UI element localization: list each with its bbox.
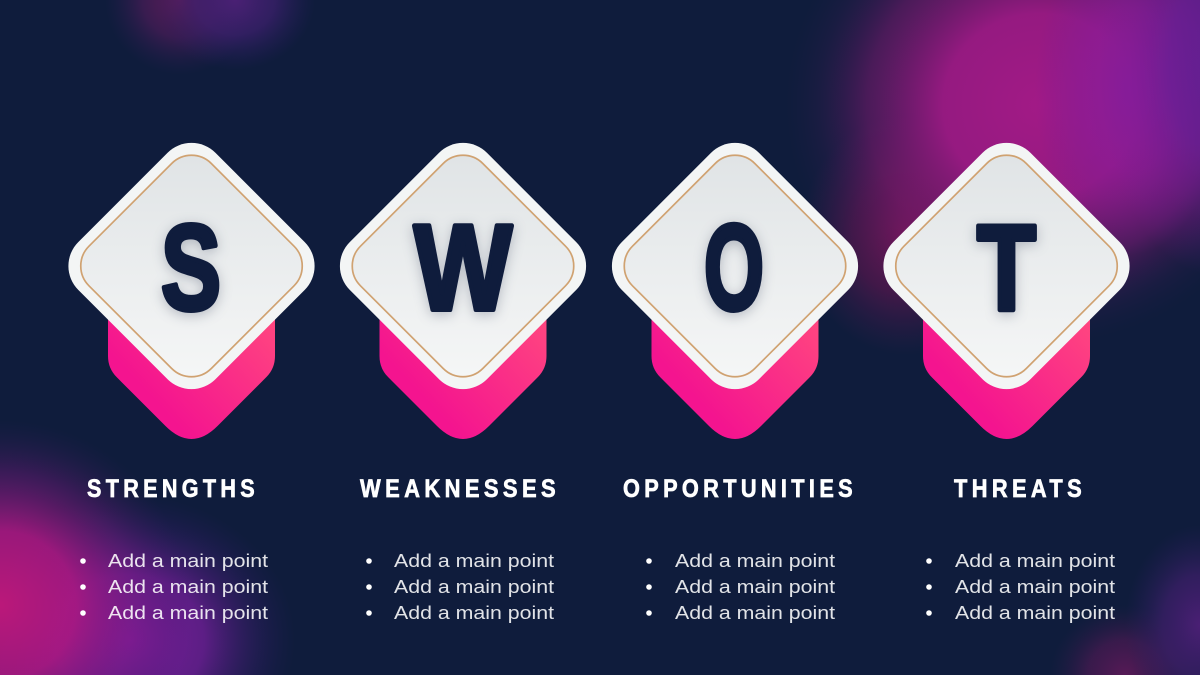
bullet list: threats <box>926 551 1115 623</box>
pink tag O <box>652 296 818 439</box>
bullet list: threats: Add a main point <box>955 577 1115 597</box>
letter S: S <box>161 200 221 336</box>
bullet list: opportunities <box>646 551 835 623</box>
bullet list: strengths: Add a main point <box>108 577 268 597</box>
panel: O opportunities icon <box>598 129 872 439</box>
letter W: W <box>414 200 513 336</box>
bullet list: weaknesses: Add a main point <box>394 577 554 597</box>
heading: threats: THREATS <box>954 475 1086 503</box>
bullet list: weaknesses <box>366 551 554 623</box>
diamond card W <box>326 129 600 403</box>
pink tag T <box>923 296 1090 439</box>
bullet list: opportunities: Add a main point <box>675 551 835 571</box>
heading: weaknesses: WEAKNESSES <box>360 475 560 503</box>
bullet list: strengths <box>80 551 268 623</box>
bullet list: threats: Add a main point <box>955 603 1115 623</box>
bullet list: threats: Add a main point <box>955 551 1115 571</box>
pink tag W <box>380 296 546 439</box>
panel: T threats icon <box>869 129 1144 439</box>
bullet list: weaknesses: Add a main point <box>394 603 554 623</box>
heading: strengths: STRENGTHS <box>87 475 259 503</box>
letter O: O <box>704 200 764 336</box>
heading: opportunities: OPPORTUNITIES <box>623 475 857 503</box>
bullet list: strengths: Add a main point <box>108 551 268 571</box>
bullet list: opportunities: Add a main point <box>675 603 835 623</box>
diamond card O <box>598 129 872 403</box>
bullet list: strengths: Add a main point <box>108 603 268 623</box>
panel: W weaknesses icon <box>326 129 600 439</box>
diamond card T <box>869 129 1144 403</box>
panel: S strengths icon <box>54 129 329 439</box>
bullet list: opportunities: Add a main point <box>675 577 835 597</box>
bullet list: weaknesses: Add a main point <box>394 551 554 571</box>
diamond card S <box>54 129 329 403</box>
letter T: T <box>977 200 1036 336</box>
pink tag S <box>108 296 275 439</box>
